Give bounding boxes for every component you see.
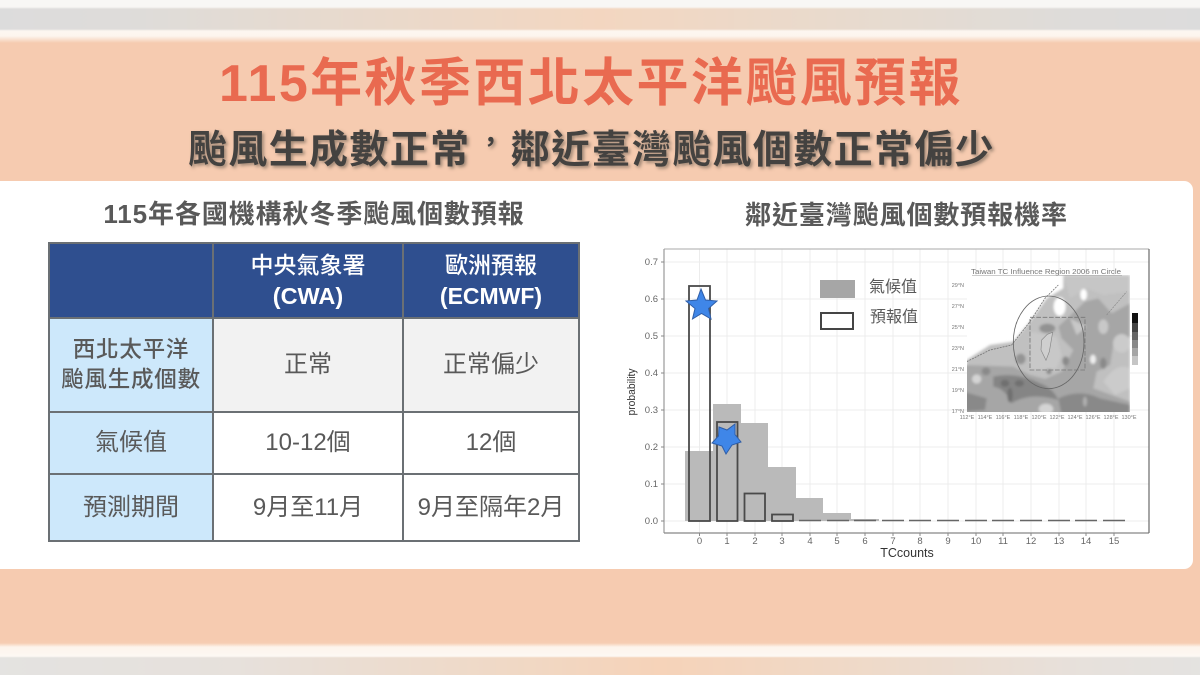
row label: forecast period: 預測期間 [83, 494, 179, 520]
climatology bars [685, 404, 879, 521]
ECMWF period: 9月至隔年2月 [418, 494, 564, 520]
header: ECMWF: (ECMWF) [440, 283, 542, 309]
ECMWF climatology: 12個 [466, 429, 516, 456]
map lon labels: 118°E [1014, 415, 1029, 421]
row label: climatology: 氣候值 [95, 429, 167, 456]
map lon labels [960, 415, 1137, 421]
probability chart [626, 248, 1150, 560]
map lon labels: 112°E [960, 415, 975, 421]
map lat labels: 23°N [952, 346, 964, 352]
x axis title: TCcounts [880, 546, 934, 560]
x axis labels: 9 [945, 536, 951, 547]
legend [820, 278, 918, 329]
white patches [1054, 297, 1066, 316]
map lat labels: 27°N [952, 304, 964, 310]
forecast bars [689, 286, 793, 521]
influence circle [1013, 296, 1084, 389]
header: ECMWF [440, 252, 542, 309]
x axis labels: 3 [779, 536, 785, 547]
header: CWA: (CWA) [273, 283, 343, 309]
y axis labels: 0.7 [645, 257, 658, 268]
light patches [1063, 275, 1130, 298]
x axis labels: 11 [998, 536, 1008, 547]
map lon labels: 130°E [1121, 415, 1137, 421]
y axis labels [645, 257, 658, 527]
row label: forecast period [49, 473, 213, 541]
y axis labels: 0.2 [645, 442, 658, 453]
map lat labels: 21°N [952, 367, 964, 373]
map lon labels: 116°E [996, 415, 1011, 421]
x axis labels: 0 [697, 536, 702, 547]
x axis labels: 1 [724, 536, 730, 547]
y axis labels: 0.0 [645, 516, 658, 527]
y axis labels: 0.1 [645, 479, 658, 490]
y axis labels: 0.3 [645, 405, 658, 416]
y axis labels: 0.6 [645, 294, 658, 305]
coastline [967, 285, 1058, 362]
x axis labels: 12 [1026, 536, 1036, 547]
ECMWF genesis value: 正常偏少 [443, 351, 539, 378]
header: ECMWF: 歐洲預報 [445, 252, 537, 278]
CWA genesis value: 正常 [284, 351, 332, 378]
inset map [952, 269, 1138, 421]
white content panel [0, 181, 1193, 569]
map lat labels: 19°N [952, 388, 964, 394]
CWA climatology: 10-12個 [265, 429, 351, 456]
row label: genesis count: 西北太平洋 [73, 336, 189, 362]
x axis labels [697, 536, 1119, 547]
ECMWF climatology [403, 412, 579, 473]
map lon labels: 122°E [1049, 415, 1065, 421]
subtitle: ， [478, 127, 504, 157]
base light field [967, 275, 1130, 413]
dashed box [1030, 317, 1085, 370]
x axis labels: 5 [834, 536, 840, 547]
forecast table [48, 242, 580, 542]
map lon labels: 124°E [1067, 415, 1083, 421]
x axis labels: 14 [1081, 536, 1091, 547]
map lat labels: 29°N [952, 283, 964, 289]
top decorative band [0, 0, 1200, 44]
CWA period: 9月至11月 [253, 494, 363, 520]
title: 115年秋季西北太平洋颱風預報 [219, 55, 963, 113]
bottom decorative band [0, 640, 1200, 675]
row label: genesis count [49, 317, 213, 412]
x axis labels: 10 [971, 536, 981, 547]
x axis labels: 7 [890, 536, 896, 547]
map title: Taiwan TC Influence Region 2006 m Circle [971, 269, 1121, 276]
x axis labels: 8 [917, 536, 923, 547]
map lat labels: 17°N [952, 409, 964, 415]
x axis labels: 13 [1054, 536, 1064, 547]
x axis labels: 4 [807, 536, 813, 547]
Taiwan island [1041, 332, 1053, 360]
map lat labels: 25°N [952, 325, 964, 331]
CWA climatology [213, 412, 403, 473]
table heading: 115年各國機構秋冬季颱風個數預報 [103, 199, 525, 229]
map lon labels: 120°E [1031, 415, 1047, 421]
blue star at 1 [712, 424, 741, 454]
ECMWF period [403, 473, 579, 541]
CWA genesis value [213, 317, 403, 412]
x axis labels: 6 [862, 536, 868, 547]
map lon labels: 126°E [1085, 415, 1101, 421]
ECMWF genesis value [403, 317, 579, 412]
y axis labels: 0.4 [645, 368, 658, 379]
row label: climatology [49, 412, 213, 473]
chart heading: 鄰近臺灣颱風個數預報機率 [745, 200, 1068, 230]
x axis labels: 15 [1109, 536, 1119, 547]
map lon labels: 114°E [978, 415, 993, 421]
legend: 預報值 [870, 308, 918, 326]
map colour scale [1132, 313, 1138, 365]
map lon labels: 128°E [1103, 415, 1119, 421]
y axis labels: 0.5 [645, 331, 658, 342]
legend: 氣候值 [869, 278, 917, 296]
blue star at 0 [686, 289, 717, 319]
y axis title: probability [626, 368, 638, 416]
CWA period [213, 473, 403, 541]
header row [49, 243, 579, 317]
map lat labels [952, 283, 964, 415]
x axis labels: 2 [752, 536, 758, 547]
row label: genesis count: 颱風生成個數 [61, 366, 201, 392]
header: CWA [250, 252, 366, 309]
header: CWA: 中央氣象署 [250, 252, 366, 278]
subtitle: 颱風生成數正常 鄰近臺灣颱風個數正常偏少 [188, 129, 995, 172]
plot border [661, 249, 1149, 536]
mid gray field [963, 298, 1130, 415]
dark patches [993, 375, 1058, 403]
